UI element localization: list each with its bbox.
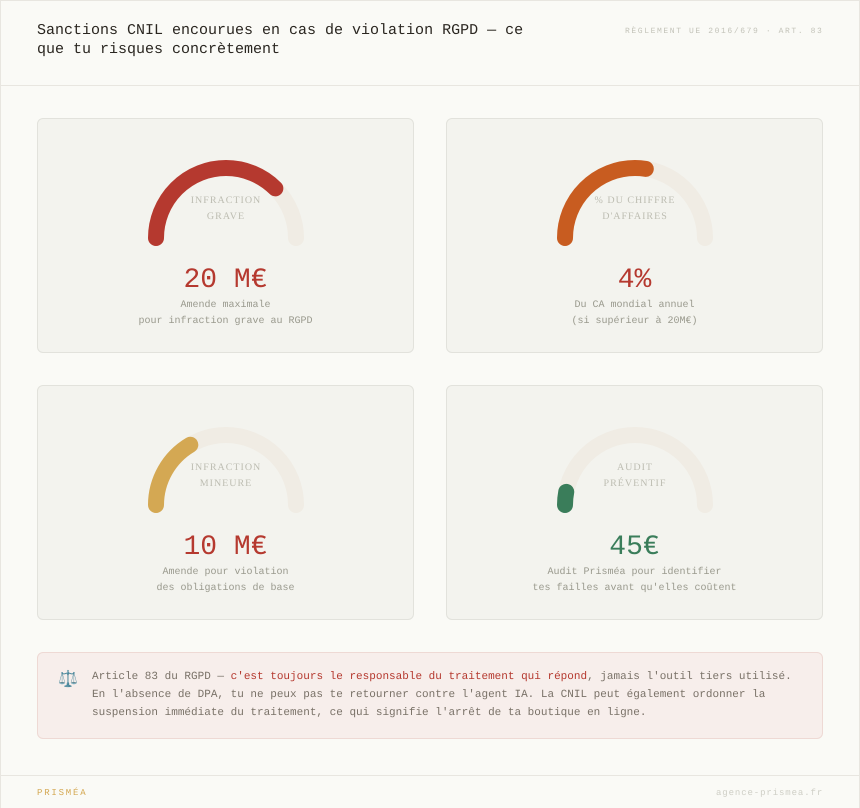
footer brand: PRISMÉA (37, 788, 87, 798)
gauge label (594, 195, 675, 222)
description: Audit Prisméa pour identifier (547, 567, 722, 578)
description: Du CA mondial annuel (574, 300, 695, 311)
description: des obligations de base (156, 583, 295, 594)
panel: chiffre d'affaires (446, 118, 823, 353)
panel: infraction grave (37, 118, 414, 353)
value: 20 M€ (183, 265, 268, 296)
gauge: 6% green (557, 427, 713, 513)
gauge: 55% orange (557, 160, 713, 246)
description (138, 300, 313, 327)
value: 4% (618, 265, 651, 296)
value: 10 M€ (183, 532, 268, 563)
description: pour infraction grave au RGPD (138, 316, 313, 327)
gauge: 33% yellow (148, 427, 304, 513)
regulation reference: RÈGLEMENT UE 2016/679 · ART. 83 (625, 27, 823, 36)
panel: audit préventif (446, 385, 823, 620)
gauge label (191, 462, 261, 489)
gauge: 75% red (148, 160, 304, 246)
gauge label: PRÉVENTIF (604, 478, 666, 489)
gauge label: D'AFFAIRES (602, 211, 668, 222)
value: 45€ (609, 532, 660, 563)
description (571, 300, 698, 327)
gauge label: INFRACTION (191, 462, 261, 473)
callout (37, 652, 823, 739)
description (156, 566, 295, 594)
callout text: Article 83 du RGPD — c'est toujours le responsable du traitement qui répond, jamais l'outil tiers utilisé. En l'absence de DPA, tu ne peux pas te retourner contre l'agent IA. La CNIL peut également ordonner la suspension immédiate du traitement, ce qui signifie l'arrêt de ta boutique en ligne. (92, 671, 792, 719)
description (532, 566, 737, 594)
description: tes failles avant qu'elles coûtent (532, 583, 737, 594)
gauge label: % DU CHIFFRE (595, 195, 675, 206)
gauge label (604, 462, 666, 489)
description: Amende pour violation (162, 567, 289, 578)
gauge label: AUDIT (617, 462, 653, 473)
gauge label: GRAVE (207, 211, 245, 222)
footer url: agence-prismea.fr (716, 788, 823, 798)
gauge label: MINEURE (200, 478, 252, 489)
description: Amende maximale (180, 300, 270, 311)
description: (si supérieur à 20M€) (571, 316, 698, 327)
title: Sanctions CNIL encourues en cas de violation RGPD — ce que tu risques concrètement (37, 22, 523, 58)
icon: scales: ⚖️ (58, 669, 78, 688)
panel: infraction mineure (37, 385, 414, 620)
gauge label (191, 195, 261, 222)
gauge label: INFRACTION (191, 195, 261, 206)
